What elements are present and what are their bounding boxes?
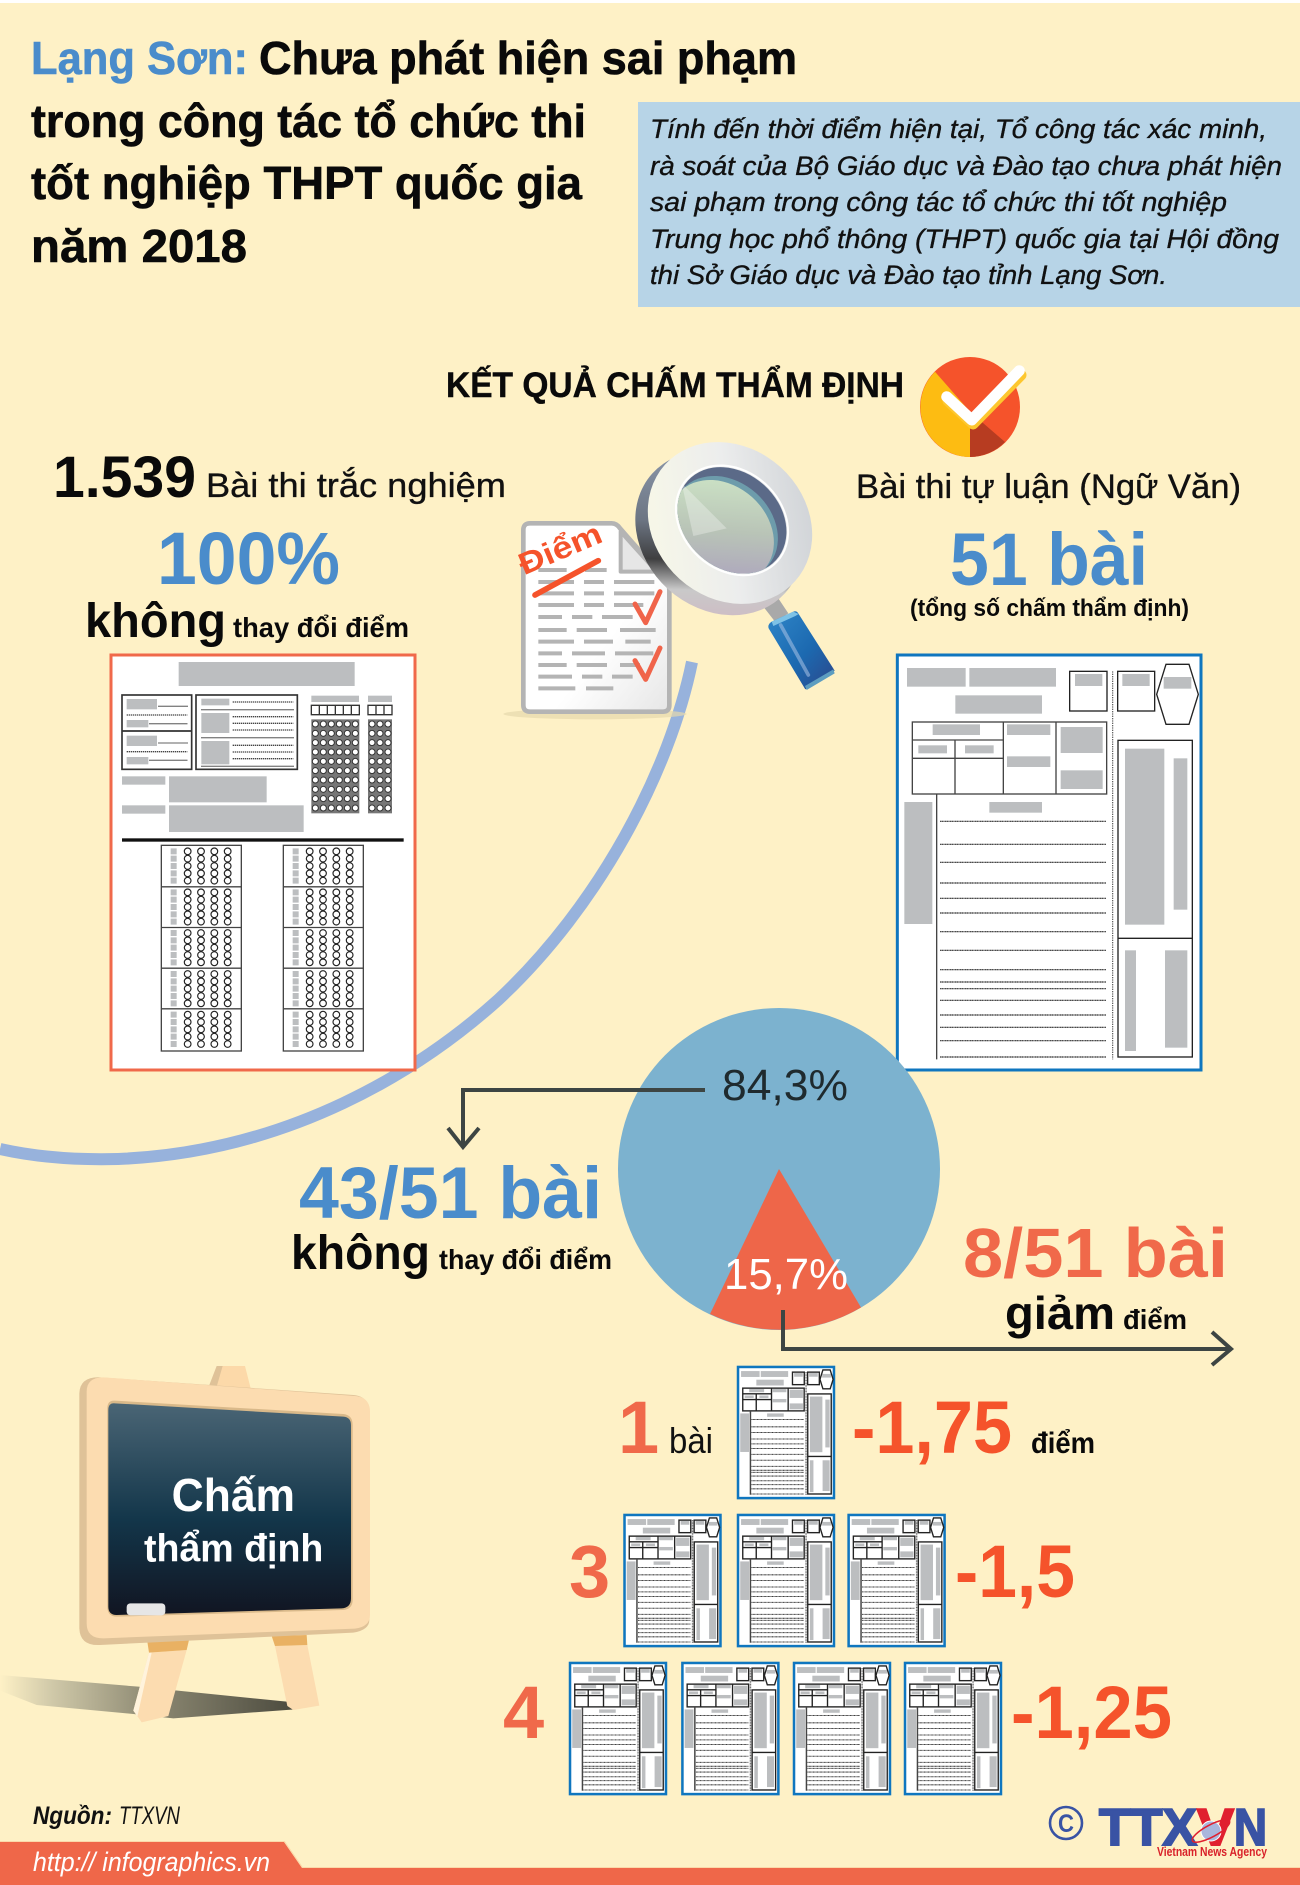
caption: total verified: (tổng số chấm thẩm định) (910, 595, 1189, 622)
logo: TTXVN: TTX (1099, 1799, 1197, 1857)
title: Lạng Sơn: (31, 32, 248, 84)
panel: essay answer sheet (897, 655, 1201, 1070)
row: 1 essay -1,75: -1,75 (852, 1386, 1012, 1469)
multiple choice count: Bài thi trắc nghiệm (206, 467, 506, 505)
icon: chalkboard: thẩm định (144, 1527, 323, 1571)
stat: 51 essays: 51 bài (950, 518, 1148, 601)
pie chart: 15,7% (724, 1250, 848, 1299)
caption: unchanged (291, 1227, 612, 1280)
caption: reduced: giảm (1005, 1287, 1115, 1339)
multiple choice count (53, 445, 506, 510)
essay label: Bài thi tự luận (Ngữ Văn) (856, 468, 1241, 506)
icon: magnifying glass (635, 442, 835, 690)
row: 3 essays -1,5: 3 (569, 1530, 610, 1613)
footer band: http:// infographics.vn (33, 1847, 270, 1877)
icon: exam paper with score: Điểm (513, 516, 607, 582)
title: Chưa phát hiện sai phạm (259, 32, 797, 84)
stat: 100%: 100% (157, 517, 340, 600)
row: 4 essays -1,25 (503, 1663, 1172, 1794)
logo: TTXVN: V (1197, 1799, 1234, 1857)
caption: unchanged: không (291, 1227, 430, 1280)
icon: check mark badge (920, 357, 1021, 457)
row: 4 essays -1,25: -1,25 (1011, 1671, 1172, 1754)
icon: chalkboard (0, 1366, 370, 1722)
row: 4 essays -1,25: 4 (503, 1671, 544, 1754)
logo: TTXVN: Vietnam News Agency (1157, 1845, 1267, 1859)
title: trong công tác tổ chức thi (31, 95, 586, 147)
arrow: to unchanged (448, 1090, 705, 1147)
panel: intro summary: Tính đến thời điểm hiện tại, Tổ công tác xác minh, (650, 114, 1267, 144)
pie chart: 84,3% (722, 1061, 848, 1110)
panel: intro summary: Trung học phổ thông (THPT) quốc gia tại Hội đồng (650, 224, 1279, 254)
icon: chalkboard: Chấm (172, 1469, 295, 1521)
caption: no change: thay đổi điểm (233, 612, 409, 643)
source: Nguồn: (33, 1802, 112, 1830)
panel: intro summary (638, 102, 1300, 307)
source (33, 1802, 181, 1830)
stat: 8 of 51: 8/51 bài (963, 1214, 1228, 1292)
row: 1 essay -1,75: bài (669, 1420, 713, 1461)
title: tốt nghiệp THPT quốc gia (31, 157, 582, 209)
stat: 43 of 51: 43/51 bài (299, 1153, 602, 1234)
caption: reduced (1005, 1287, 1187, 1339)
panel: intro summary: rà soát của Bộ Giáo dục và Đào tạo chưa phát hiện (650, 151, 1282, 181)
multiple choice count: 1.539 (53, 445, 196, 510)
pie chart (618, 1008, 940, 1330)
heading: verification results: KẾT QUẢ CHẤM THẨM ĐỊNH (446, 365, 904, 405)
arrow: to reduced (783, 1310, 1231, 1365)
row: 3 essays -1,5: -1,5 (955, 1530, 1075, 1613)
caption: no change: không (85, 595, 226, 648)
caption: unchanged: thay đổi điểm (439, 1244, 612, 1275)
logo: TTXVN: N (1234, 1799, 1267, 1857)
arc connector (0, 662, 692, 1159)
panel: intro summary: sai phạm trong công tác tổ chức thi tốt nghiệp (650, 187, 1227, 217)
row: 1 essay -1,75: 1 (618, 1386, 659, 1469)
icon: exam paper with score (503, 516, 687, 719)
title (31, 32, 797, 272)
caption: no change (85, 595, 409, 648)
title: năm 2018 (31, 220, 247, 272)
row: 1 essay -1,75 (618, 1367, 1095, 1498)
footer band (0, 1842, 1300, 1885)
logo: TTXVN (1050, 1799, 1267, 1859)
source: TTXVN (119, 1802, 181, 1830)
logo: TTXVN: C (1058, 1810, 1074, 1838)
caption: reduced: điểm (1123, 1304, 1187, 1335)
row: 1 essay -1,75: điểm (1031, 1427, 1095, 1460)
row: 3 essays -1,5 (569, 1515, 1075, 1646)
panel: multiple choice answer sheet (111, 655, 415, 1070)
panel: intro summary: thi Sở Giáo dục và Đào tạo tỉnh Lạng Sơn. (650, 260, 1167, 290)
